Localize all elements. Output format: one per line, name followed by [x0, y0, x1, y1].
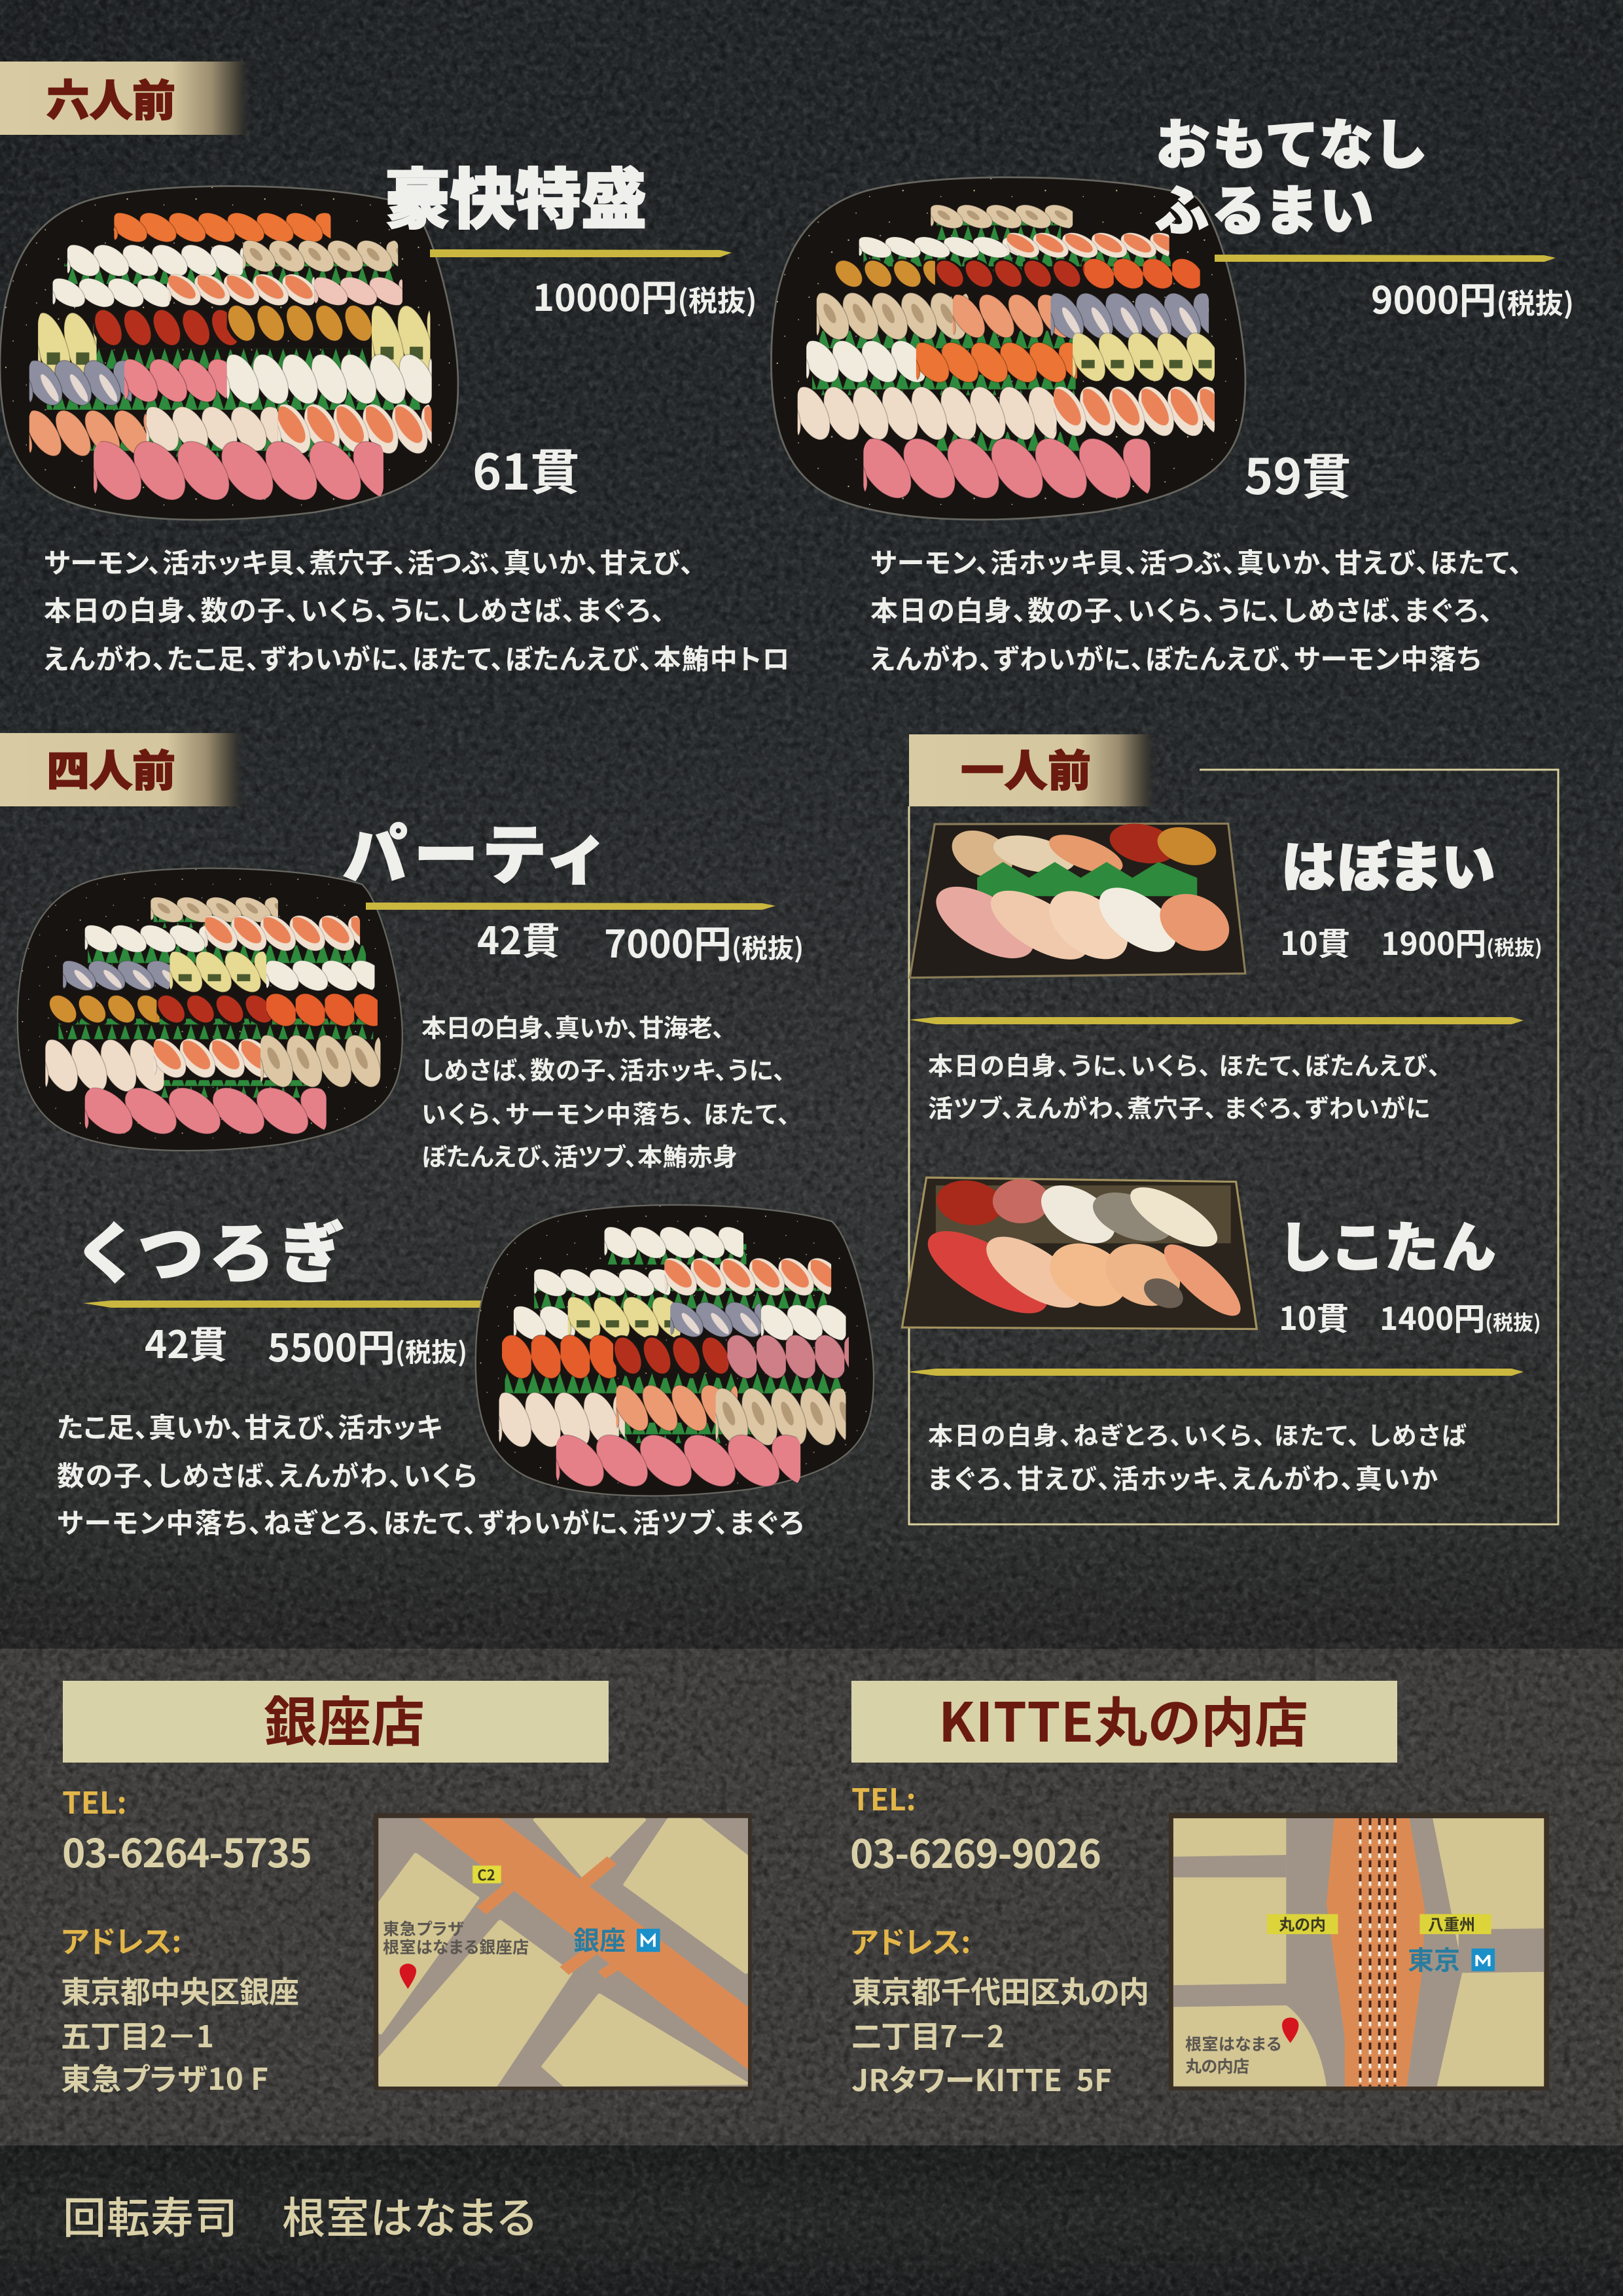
- map: Tokyo station: 根室はなまる: [1185, 2032, 1281, 2055]
- address: 東京都中央区銀座: [61, 1969, 299, 2012]
- heading badge: 四人前: 四人前: [46, 736, 175, 799]
- title: おもてなし ふるまい: ふるまい: [1156, 168, 1373, 245]
- count and price: くつろぎ: 42貫: [145, 1314, 227, 1369]
- telephone: TEL:: [851, 1776, 916, 1820]
- address: [850, 1919, 1149, 2100]
- ingredient list: パーティ: いくら、サーモン中落ち、 ほたて、: [421, 1094, 790, 1130]
- panel: footer band: [0, 2145, 1623, 2296]
- heading badge: 一人前: [909, 734, 1158, 806]
- ingredient list: くつろぎ: [57, 1406, 804, 1541]
- count and price: パーティ: [477, 910, 804, 969]
- address: 二丁目7－2: [851, 2013, 1005, 2056]
- map: Ginza station: 銀座: [573, 1920, 626, 1958]
- gold rule: [430, 249, 732, 257]
- telephone: [62, 1780, 312, 1879]
- address: [61, 1918, 299, 2099]
- ingredient list: はぼまい: [928, 1046, 1440, 1124]
- ingredient list: はぼまい: 本日の白身、うに、いくら、 ほたて、ぼたんえび、: [928, 1046, 1440, 1082]
- ingredient list: しこたん: [928, 1416, 1467, 1496]
- map: Ginza station: 東急プラザ: [383, 1916, 464, 1940]
- address: 東京都千代田区丸の内: [851, 1969, 1149, 2012]
- ingredient list: 豪快特盛: 本日の白身、数の子、いくら、うに、しめさば、まぐろ、: [44, 589, 665, 629]
- telephone: 03-6269-9026: [850, 1823, 1101, 1880]
- address: JRタワーKITTE 5F: [851, 2057, 1112, 2100]
- store name bar: [63, 1679, 609, 1763]
- photo: くつろぎ sushi tray: [476, 1205, 874, 1496]
- title: くつろぎ: くつろぎ: [80, 1201, 343, 1295]
- ingredient list: くつろぎ: サーモン中落ち、ねぎとろ、ほたて、ずわいがに、活ツブ、まぐろ: [57, 1501, 804, 1541]
- footer: restaurant name: 回転寿司 根室はなまる: [63, 2183, 536, 2246]
- count and price: パーティ: 42貫: [477, 910, 560, 965]
- photo: おもてなしふるまい sushi tray: [771, 177, 1245, 520]
- address: アドレス:: [850, 1919, 971, 1962]
- count and price: はぼまい: 1900円(税抜): [1381, 918, 1543, 964]
- store name bar: 銀座店: [264, 1679, 425, 1757]
- ingredient list: 豪快特盛: えんがわ、たこ足、ずわいがに、ほたて、ぼたんえび、本鮪中トロ: [44, 637, 790, 677]
- address: 五丁目2－1: [61, 2013, 214, 2056]
- telephone: TEL:: [62, 1780, 127, 1823]
- piece count: 61貫: 61貫: [473, 433, 580, 504]
- photo: 豪快特盛 sushi tray: [0, 186, 458, 520]
- count and price: はぼまい: 10貫: [1280, 918, 1350, 965]
- gold rule: [1215, 255, 1556, 262]
- heading badge: 六人前: 六人前: [46, 66, 175, 129]
- map: Ginza station: 根室はなまる銀座店: [383, 1935, 529, 1958]
- map: Tokyo station: 東京: [1408, 1939, 1460, 1977]
- frame outline: [909, 770, 1558, 1524]
- count and price: しこたん: 1400円(税抜): [1380, 1293, 1541, 1339]
- title: おもてなし ふるまい: [1156, 101, 1424, 245]
- ingredient list: しこたん: まぐろ、甘えび、活ホッキ、えんがわ、真いか: [928, 1457, 1438, 1496]
- ingredient list: パーティ: しめさば、数の子、活ホッキ、うに、: [421, 1050, 785, 1086]
- ingredient list: しこたん: 本日の白身、ねぎとろ、いくら、 ほたて、 しめさば: [928, 1416, 1467, 1452]
- section: six person sets: [0, 62, 1574, 677]
- count and price: しこたん: [1279, 1293, 1541, 1340]
- count and price: くつろぎ: [145, 1314, 467, 1372]
- price: 9000円: 9000円(税抜): [1371, 271, 1574, 325]
- photo: パーティ sushi tray: [18, 869, 402, 1151]
- price: 10000円: 10000円(税抜): [533, 269, 757, 322]
- telephone: 03-6264-5735: [62, 1822, 312, 1879]
- heading badge: 四人前: [0, 733, 246, 806]
- gold rule: [907, 1369, 1524, 1376]
- store name bar: [851, 1679, 1397, 1763]
- map: Tokyo station: 丸の内: [1279, 1912, 1326, 1935]
- telephone: [850, 1776, 1101, 1880]
- map: Tokyo station: [1169, 1812, 1549, 2090]
- title: しこたん: しこたん: [1281, 1204, 1495, 1282]
- ingredient list: おもてなしふるまい: 本日の白身、数の子、いくら、うに、しめさば、まぐろ、: [870, 589, 1493, 629]
- ingredient list: くつろぎ: 数の子、しめさば、えんがわ、いくら: [57, 1454, 477, 1494]
- count and price: くつろぎ: 5500円(税抜): [268, 1318, 467, 1372]
- count and price: しこたん: 10貫: [1279, 1293, 1349, 1340]
- piece count: 59貫: 59貫: [1244, 437, 1351, 509]
- ingredient list: パーティ: [421, 1008, 790, 1173]
- address: 東急プラザ10 F: [61, 2056, 268, 2099]
- title: おもてなし ふるまい: おもてなし: [1156, 101, 1424, 179]
- store: KITTE丸の内店: [850, 1679, 1549, 2100]
- address: アドレス:: [61, 1918, 181, 1962]
- map: Tokyo station: 八重州: [1428, 1912, 1475, 1935]
- panel: store information band: [0, 1649, 1623, 2145]
- ingredient list: おもてなしふるまい: [870, 541, 1522, 677]
- count and price: はぼまい: [1280, 918, 1543, 965]
- map: Ginza station: C2: [477, 1864, 495, 1885]
- map: Ginza station: [374, 1813, 752, 2090]
- title: はぼまい: はぼまい: [1281, 824, 1495, 902]
- title: パーティ: パーティ: [344, 804, 600, 897]
- map: Tokyo station: 丸の内店: [1185, 2054, 1249, 2077]
- heading badge: 六人前: [0, 62, 252, 135]
- gold rule: [83, 1300, 491, 1308]
- count and price: パーティ: 7000円(税抜): [604, 914, 804, 969]
- ingredient list: くつろぎ: たこ足、真いか、甘えび、活ホッキ: [57, 1406, 442, 1446]
- store name bar: KITTE丸の内店: [938, 1679, 1308, 1757]
- ingredient list: 豪快特盛: [44, 541, 790, 677]
- panel: single person sets: [902, 734, 1558, 1524]
- store: 銀座店: [61, 1679, 752, 2099]
- gold rule: [366, 903, 776, 910]
- photo: はぼまい sushi tray: [910, 818, 1245, 978]
- ingredient list: 豪快特盛: サーモン、活ホッキ貝、煮穴子、活つぶ、真いか、甘えび、: [44, 541, 694, 581]
- section: four person sets: [0, 733, 874, 1541]
- ingredient list: パーティ: 本日の白身、真いか、甘海老、: [421, 1008, 724, 1044]
- ingredient list: おもてなしふるまい: サーモン、活ホッキ貝、活つぶ、真いか、甘えび、ほたて、: [870, 541, 1522, 581]
- ingredient list: はぼまい: 活ツブ、えんがわ、煮穴子、 まぐろ、ずわいがに: [928, 1088, 1430, 1124]
- photo: しこたん sushi tray: [902, 1174, 1257, 1329]
- title: 豪快特盛: 豪快特盛: [385, 147, 647, 242]
- heading badge: 一人前: 一人前: [961, 736, 1091, 799]
- ingredient list: おもてなしふるまい: えんがわ、ずわいがに、ぼたんえび、サーモン中落ち: [870, 637, 1481, 677]
- ingredient list: パーティ: ぼたんえび、活ツブ、本鮪赤身: [421, 1137, 738, 1173]
- gold rule: [909, 1017, 1524, 1024]
